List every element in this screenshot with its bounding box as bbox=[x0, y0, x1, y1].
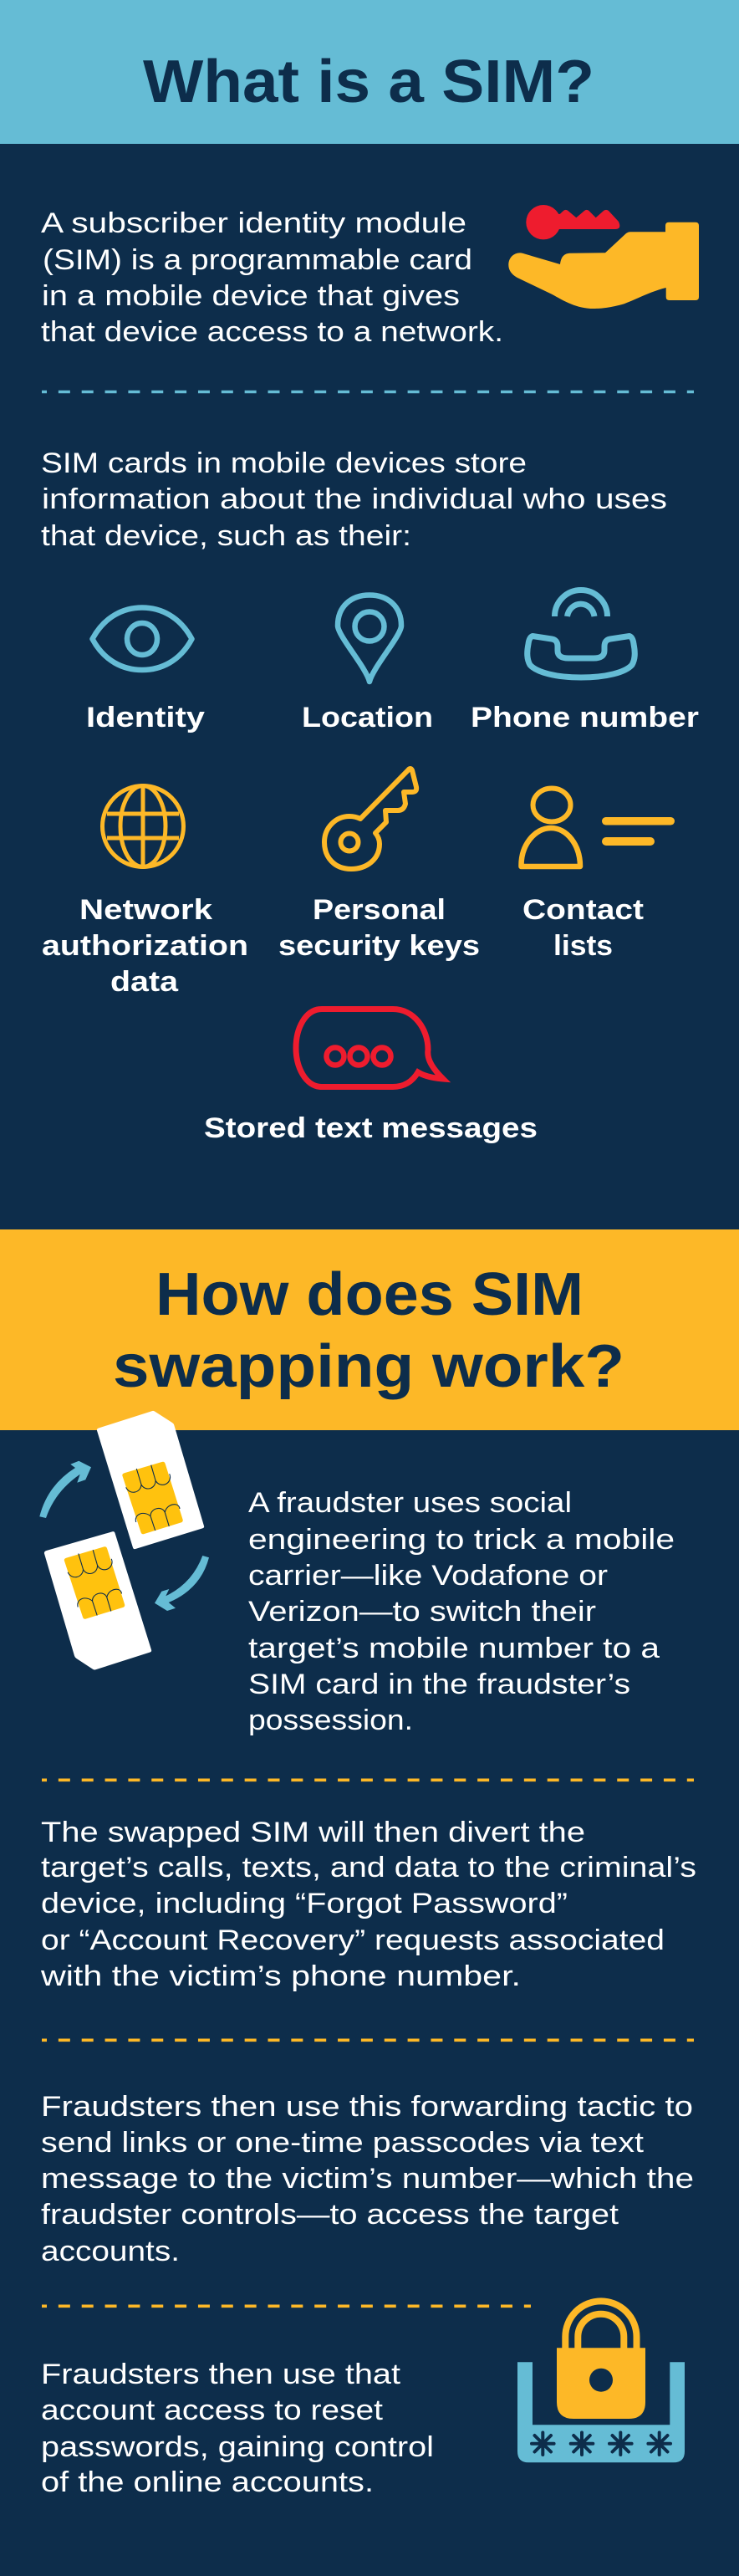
label: stored text messages: Stored text messages bbox=[204, 1112, 538, 1144]
panel: what is a SIM header bbox=[0, 0, 739, 144]
text block: step four: account access to reset bbox=[41, 2395, 384, 2426]
text block: step one: SIM card in the fraudster’s bbox=[248, 1669, 630, 1700]
text block: step one: possession. bbox=[248, 1705, 413, 1736]
chip bottom bbox=[64, 1546, 125, 1619]
password asterisks bbox=[532, 2432, 670, 2455]
keyhole bbox=[589, 2369, 613, 2392]
label: contact lists bbox=[522, 894, 644, 962]
label: network authorization data bbox=[42, 894, 248, 998]
text block: step four bbox=[41, 2359, 434, 2498]
text block: step three: send links or one-time passcodes via text bbox=[41, 2127, 645, 2159]
text block: step three: accounts. bbox=[41, 2236, 180, 2267]
label: personal security keys bbox=[278, 894, 480, 962]
arrow: down left bbox=[155, 1556, 209, 1611]
panel: how does SIM swapping work header bbox=[0, 1229, 739, 1430]
text block: SIM definition: that device access to a network. bbox=[41, 316, 503, 348]
label: contact lists: lists bbox=[553, 930, 613, 962]
icon: contact list bbox=[521, 788, 675, 866]
text block: step four: of the online accounts. bbox=[41, 2466, 374, 2498]
label: location: Location bbox=[302, 702, 433, 733]
icon: padlock with password field bbox=[517, 2301, 685, 2462]
text block: step one: Verizon—to switch their bbox=[248, 1596, 596, 1628]
divider: blue dashes bbox=[42, 391, 694, 393]
text block: step two: or “Account Recovery” requests associated bbox=[41, 1924, 665, 1956]
text block: step three: Fraudsters then use this forwarding tactic to bbox=[41, 2091, 693, 2123]
label: personal security keys: security keys bbox=[278, 930, 480, 962]
label: network authorization data: data bbox=[110, 966, 179, 998]
text block: step one: engineering to trick a mobile bbox=[248, 1524, 675, 1556]
icon: hand holding key bbox=[508, 205, 699, 309]
text block: step three: fraudster controls—to access the target bbox=[41, 2199, 619, 2231]
icon: globe bbox=[102, 785, 184, 867]
SIM card top bbox=[97, 1411, 204, 1549]
icon: phone bbox=[527, 590, 635, 677]
title: how does SIM swapping work: swapping work? bbox=[113, 1333, 624, 1400]
text block: step two: target’s calls, texts, and data to the criminal’s bbox=[41, 1852, 696, 1883]
title: how does SIM swapping work bbox=[113, 1261, 624, 1400]
label: phone number: Phone number bbox=[471, 702, 699, 733]
text block: step three bbox=[41, 2091, 694, 2267]
padlock body bbox=[557, 2348, 645, 2419]
text block: SIM definition: in a mobile device that gives bbox=[42, 280, 460, 312]
icon: speech bubble bbox=[296, 1009, 443, 1087]
text block: step two bbox=[40, 1817, 696, 1992]
SIM card bottom bbox=[44, 1531, 151, 1669]
text block: SIM definition: (SIM) is a programmable card bbox=[43, 244, 472, 276]
text block: step two: with the victim’s phone number. bbox=[40, 1960, 521, 1992]
hand bbox=[508, 222, 699, 309]
text block: step one: A fraudster uses social bbox=[248, 1487, 572, 1519]
title: how does SIM swapping work: How does SIM bbox=[155, 1261, 584, 1328]
text block: step four: passwords, gaining control bbox=[41, 2431, 434, 2463]
arrow: up right bbox=[39, 1461, 91, 1518]
text block: SIM card storage intro: information about the individual who uses bbox=[42, 483, 667, 515]
label: identity: Identity bbox=[86, 702, 205, 733]
text block: step one: target’s mobile number to a bbox=[248, 1633, 660, 1664]
chip top bbox=[122, 1462, 183, 1534]
key bbox=[526, 205, 619, 239]
icon: security key bbox=[324, 769, 416, 869]
title: what is a SIM: What is a SIM? bbox=[143, 49, 594, 115]
text block: step two: device, including “Forgot Password” bbox=[41, 1888, 568, 1919]
text block: step one bbox=[248, 1487, 675, 1736]
text block: SIM card storage intro bbox=[41, 447, 667, 552]
padlock shackle bbox=[565, 2301, 637, 2349]
divider: yellow dashes three bbox=[42, 2305, 531, 2308]
icon: two SIM cards swapping bbox=[39, 1411, 209, 1669]
text block: SIM card storage intro: SIM cards in mobile devices store bbox=[41, 447, 527, 479]
text block: SIM definition bbox=[41, 207, 503, 348]
icon: location pin bbox=[338, 595, 401, 682]
label: personal security keys: Personal bbox=[313, 894, 446, 926]
label: network authorization data: authorization bbox=[42, 930, 248, 962]
text block: SIM card storage intro: that device, such as their: bbox=[41, 520, 411, 552]
password field bbox=[517, 2362, 685, 2462]
text block: step one: carrier—like Vodafone or bbox=[248, 1560, 608, 1592]
text block: step two: The swapped SIM will then divert the bbox=[41, 1817, 585, 1848]
label: network authorization data: Network bbox=[79, 894, 212, 926]
divider: yellow dashes two bbox=[42, 2039, 694, 2042]
label: contact lists: Contact bbox=[522, 894, 644, 926]
text block: SIM definition: A subscriber identity module bbox=[41, 207, 466, 239]
divider: yellow dashes one bbox=[42, 1779, 694, 1781]
text block: step four: Fraudsters then use that bbox=[41, 2359, 401, 2390]
icon: eye bbox=[92, 607, 192, 670]
text block: step three: message to the victim’s number—which the bbox=[41, 2163, 694, 2195]
